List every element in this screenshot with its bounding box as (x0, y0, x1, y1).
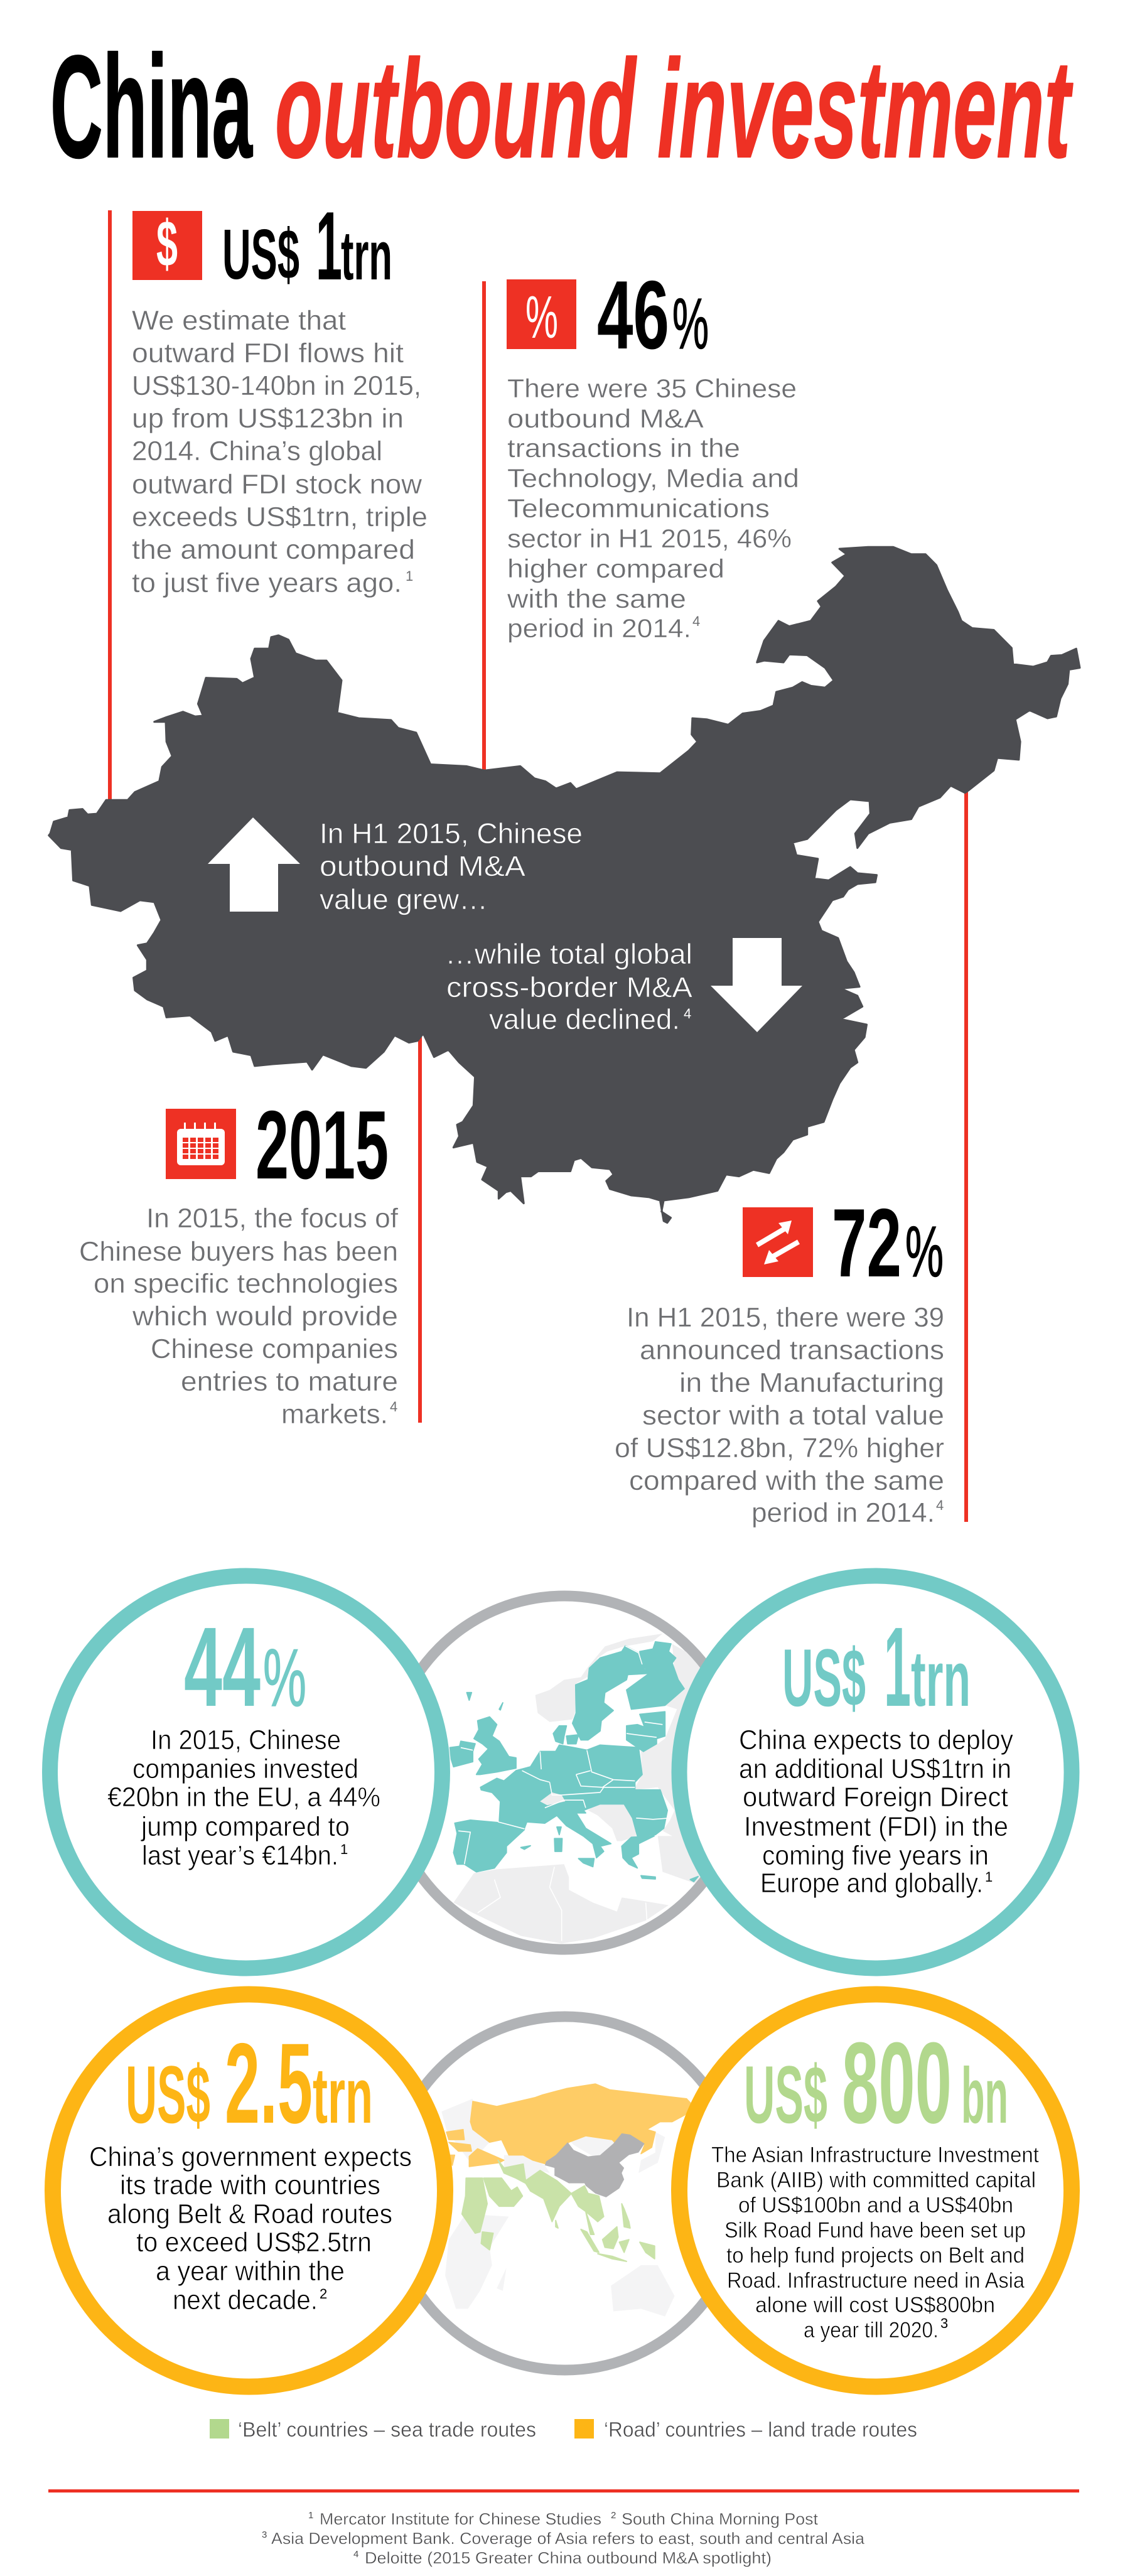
text block: to just five years ago. (132, 568, 402, 598)
icon: dollar: $ (156, 208, 178, 281)
text block: 2 (320, 2286, 327, 2302)
text block: an additional US$1trn in (739, 1754, 1011, 1784)
text: outbound value grew: In H1 2015, Chinese (320, 817, 583, 849)
text block: a year within the (156, 2256, 345, 2287)
text block (739, 1725, 1013, 1899)
title: China (50, 26, 253, 188)
map: Europe (450, 1634, 713, 1944)
text: global value declined: 4 (684, 1006, 691, 1021)
stat: US$ 2.5trn: trn (313, 2052, 373, 2140)
text block: exceeds US$1trn, triple (132, 502, 428, 532)
text block (107, 1725, 380, 1871)
stat: US$ 1trn: trn (911, 1636, 971, 1723)
text block: outward FDI stock now (132, 469, 422, 500)
text block: in the Manufacturing (679, 1367, 944, 1398)
text block: outward Foreign Direct (743, 1782, 1008, 1813)
text block: 1 (340, 1841, 348, 1857)
heading: 2015: 2015 (256, 1091, 389, 1199)
text block: next decade. (173, 2285, 318, 2315)
text block: 2014. China’s global (132, 436, 382, 466)
stat: US$ 800bn: 800 (842, 2018, 952, 2147)
map: China silhouette (49, 547, 1080, 1223)
ring: US$ 800bn circle: bn (961, 2052, 1008, 2140)
panel: 2015 (79, 1091, 399, 1430)
heading: 72%: % (905, 1212, 944, 1292)
heading: 46%: % (672, 284, 709, 364)
text block: Europe and globally. (760, 1868, 983, 1899)
text block: 1 (985, 1869, 993, 1885)
stat: US$ 800bn: US$ (744, 2049, 827, 2140)
text block: the amount compared (132, 534, 415, 565)
text block: 1 (406, 568, 413, 584)
heading: US$ 1trn: trn (341, 217, 392, 294)
text block: There were 35 Chinese (507, 374, 797, 403)
text block: jump compared to (140, 1811, 350, 1842)
stat: US$ 2.5trn (126, 2019, 373, 2147)
text: global value declined: cross-border M&A (446, 971, 692, 1003)
text block: outbound M&A (507, 404, 704, 433)
text block (132, 305, 428, 598)
text block: announced transactions (640, 1335, 944, 1366)
text block: which would provide (132, 1301, 398, 1332)
text block: sector with a total value (642, 1400, 944, 1431)
text block (89, 2142, 412, 2315)
text block: with the same (507, 584, 686, 613)
text block: 4 (692, 613, 700, 629)
ring: Europe map (418, 1591, 707, 1955)
stat: 44%: 44 (184, 1604, 261, 1730)
text block: companies invested (132, 1754, 358, 1784)
text block: Bank (AIIB) with committed capital (716, 2168, 1036, 2192)
stat: US$ 800bn (744, 2018, 1008, 2147)
text block: period in 2014. (751, 1497, 935, 1528)
text block: alone will cost US$800bn (755, 2293, 995, 2317)
legend (210, 2418, 917, 2441)
icon: percent (507, 279, 576, 351)
footnotes: 4 (353, 2549, 358, 2560)
stat: US$ 1trn (782, 1604, 971, 1730)
heading: US$ 1trn (222, 191, 392, 300)
heading: US$ 1trn: US$ (222, 215, 299, 294)
text block (507, 374, 799, 643)
text: global value declined (445, 938, 692, 1035)
stat: US$ 2.5trn: 2.5 (225, 2019, 313, 2147)
text block (615, 1302, 944, 1528)
text block: entries to mature (181, 1366, 398, 1397)
stat: US$ 1trn: 1 (884, 1604, 911, 1730)
text block: Chinese companies (151, 1334, 398, 1364)
footnotes: Mercator Institute for Chinese Studies (320, 2509, 601, 2528)
text block: along Belt & Road routes (107, 2199, 392, 2229)
stat: 44%: % (263, 1632, 306, 1723)
footnotes: 3 (262, 2530, 267, 2540)
footnotes: South China Morning Post (622, 2509, 819, 2528)
callout lines (108, 210, 968, 1522)
footnotes (262, 2509, 865, 2567)
text block: 4 (390, 1399, 397, 1415)
text block: China expects to deploy (739, 1725, 1013, 1755)
text block: In H1 2015, there were 39 (627, 1302, 944, 1333)
stat: US$ 1trn: US$ (782, 1632, 866, 1723)
panel: 72% (615, 1188, 944, 1528)
text block: coming five years in (762, 1840, 989, 1871)
text block: China’s government expects (89, 2142, 412, 2172)
footnotes: Asia Development Bank. Coverage of Asia refers to east, south and central Asia (271, 2529, 865, 2548)
text block: higher compared (507, 554, 724, 583)
text: global value declined: value declined. (489, 1003, 680, 1035)
text: outbound value grew (320, 817, 583, 915)
heading: 46%: 46 (597, 261, 669, 369)
ring: US$ 2.5trn circle (53, 1994, 445, 2387)
legend: road: ‘Road’ countries – land trade routes (604, 2418, 917, 2441)
text block: €20bn in the EU, a 44% (107, 1782, 380, 1813)
text: outbound value grew: value grew… (320, 883, 488, 915)
rule (48, 2489, 1079, 2492)
text: global value declined: …while total global (445, 938, 692, 970)
stat: US$ 2.5trn: US$ (126, 2049, 210, 2140)
text block: In 2015, the focus of (146, 1203, 399, 1234)
icon: calendar (166, 1109, 236, 1179)
text block: of US$12.8bn, 72% higher (615, 1433, 944, 1463)
heading: US$ 1trn: 1 (316, 191, 342, 300)
text block (79, 1203, 399, 1430)
icon: percent: % (525, 284, 558, 351)
legend: belt: ‘Belt’ countries – sea trade routes (238, 2418, 536, 2441)
text block: compared with the same (629, 1465, 944, 1496)
footnotes: 1 (308, 2510, 313, 2521)
text block: markets. (281, 1399, 388, 1430)
ring: 44% circle (50, 1576, 442, 1968)
footnotes: Deloitte (2015 Greater China outbound M&A spotlight) (365, 2548, 772, 2567)
footnotes: 2 (611, 2510, 616, 2521)
text block: The Asian Infrastructure Investment (711, 2143, 1039, 2167)
icon: dollar (132, 208, 202, 281)
text block: to exceed US$2.5trn (136, 2227, 372, 2258)
ring: Asia map (419, 2012, 708, 2376)
text: outbound value grew: outbound M&A (320, 850, 525, 882)
arrow down (711, 938, 802, 1032)
text block: US$130-140bn in 2015, (132, 370, 421, 401)
text block: In 2015, Chinese (151, 1725, 341, 1755)
panel: 46% (507, 261, 799, 643)
text block: on specific technologies (94, 1268, 398, 1299)
text block: period in 2014. (507, 613, 691, 643)
text block: 4 (936, 1497, 944, 1513)
arrow up (208, 817, 300, 912)
ring: US$ 800bn circle (679, 1994, 1072, 2387)
text block: up from US$123bn in (132, 403, 404, 434)
text block: outward FDI flows hit (132, 338, 404, 369)
text block: of US$100bn and a US$40bn (738, 2193, 1013, 2218)
text block: Chinese buyers has been (79, 1236, 398, 1267)
text block: transactions in the (507, 433, 740, 463)
text block: to help fund projects on Belt and (726, 2243, 1025, 2268)
text block: We estimate that (132, 305, 346, 336)
panel: US$ 1trn (132, 191, 428, 598)
text block: a year till 2020. (804, 2318, 939, 2342)
text block: Investment (FDI) in the (744, 1811, 1008, 1842)
icon: exchange arrows (743, 1207, 813, 1277)
text block: Road. Infrastructure need in Asia (727, 2268, 1025, 2293)
text block: Silk Road Fund have been set up (724, 2218, 1026, 2243)
text block: Telecommunications (507, 493, 770, 523)
text block: sector in H1 2015, 46% (507, 524, 792, 553)
heading: 72%: 72 (832, 1188, 902, 1297)
text block (711, 2143, 1039, 2342)
text block: 3 (940, 2315, 948, 2331)
text block: its trade with countries (120, 2170, 380, 2201)
ring: US$ 1trn circle (679, 1576, 1072, 1968)
text block: Technology, Media and (507, 463, 799, 493)
map: Belt and Road (441, 2084, 694, 2317)
text block: last year’s €14bn. (142, 1840, 338, 1871)
